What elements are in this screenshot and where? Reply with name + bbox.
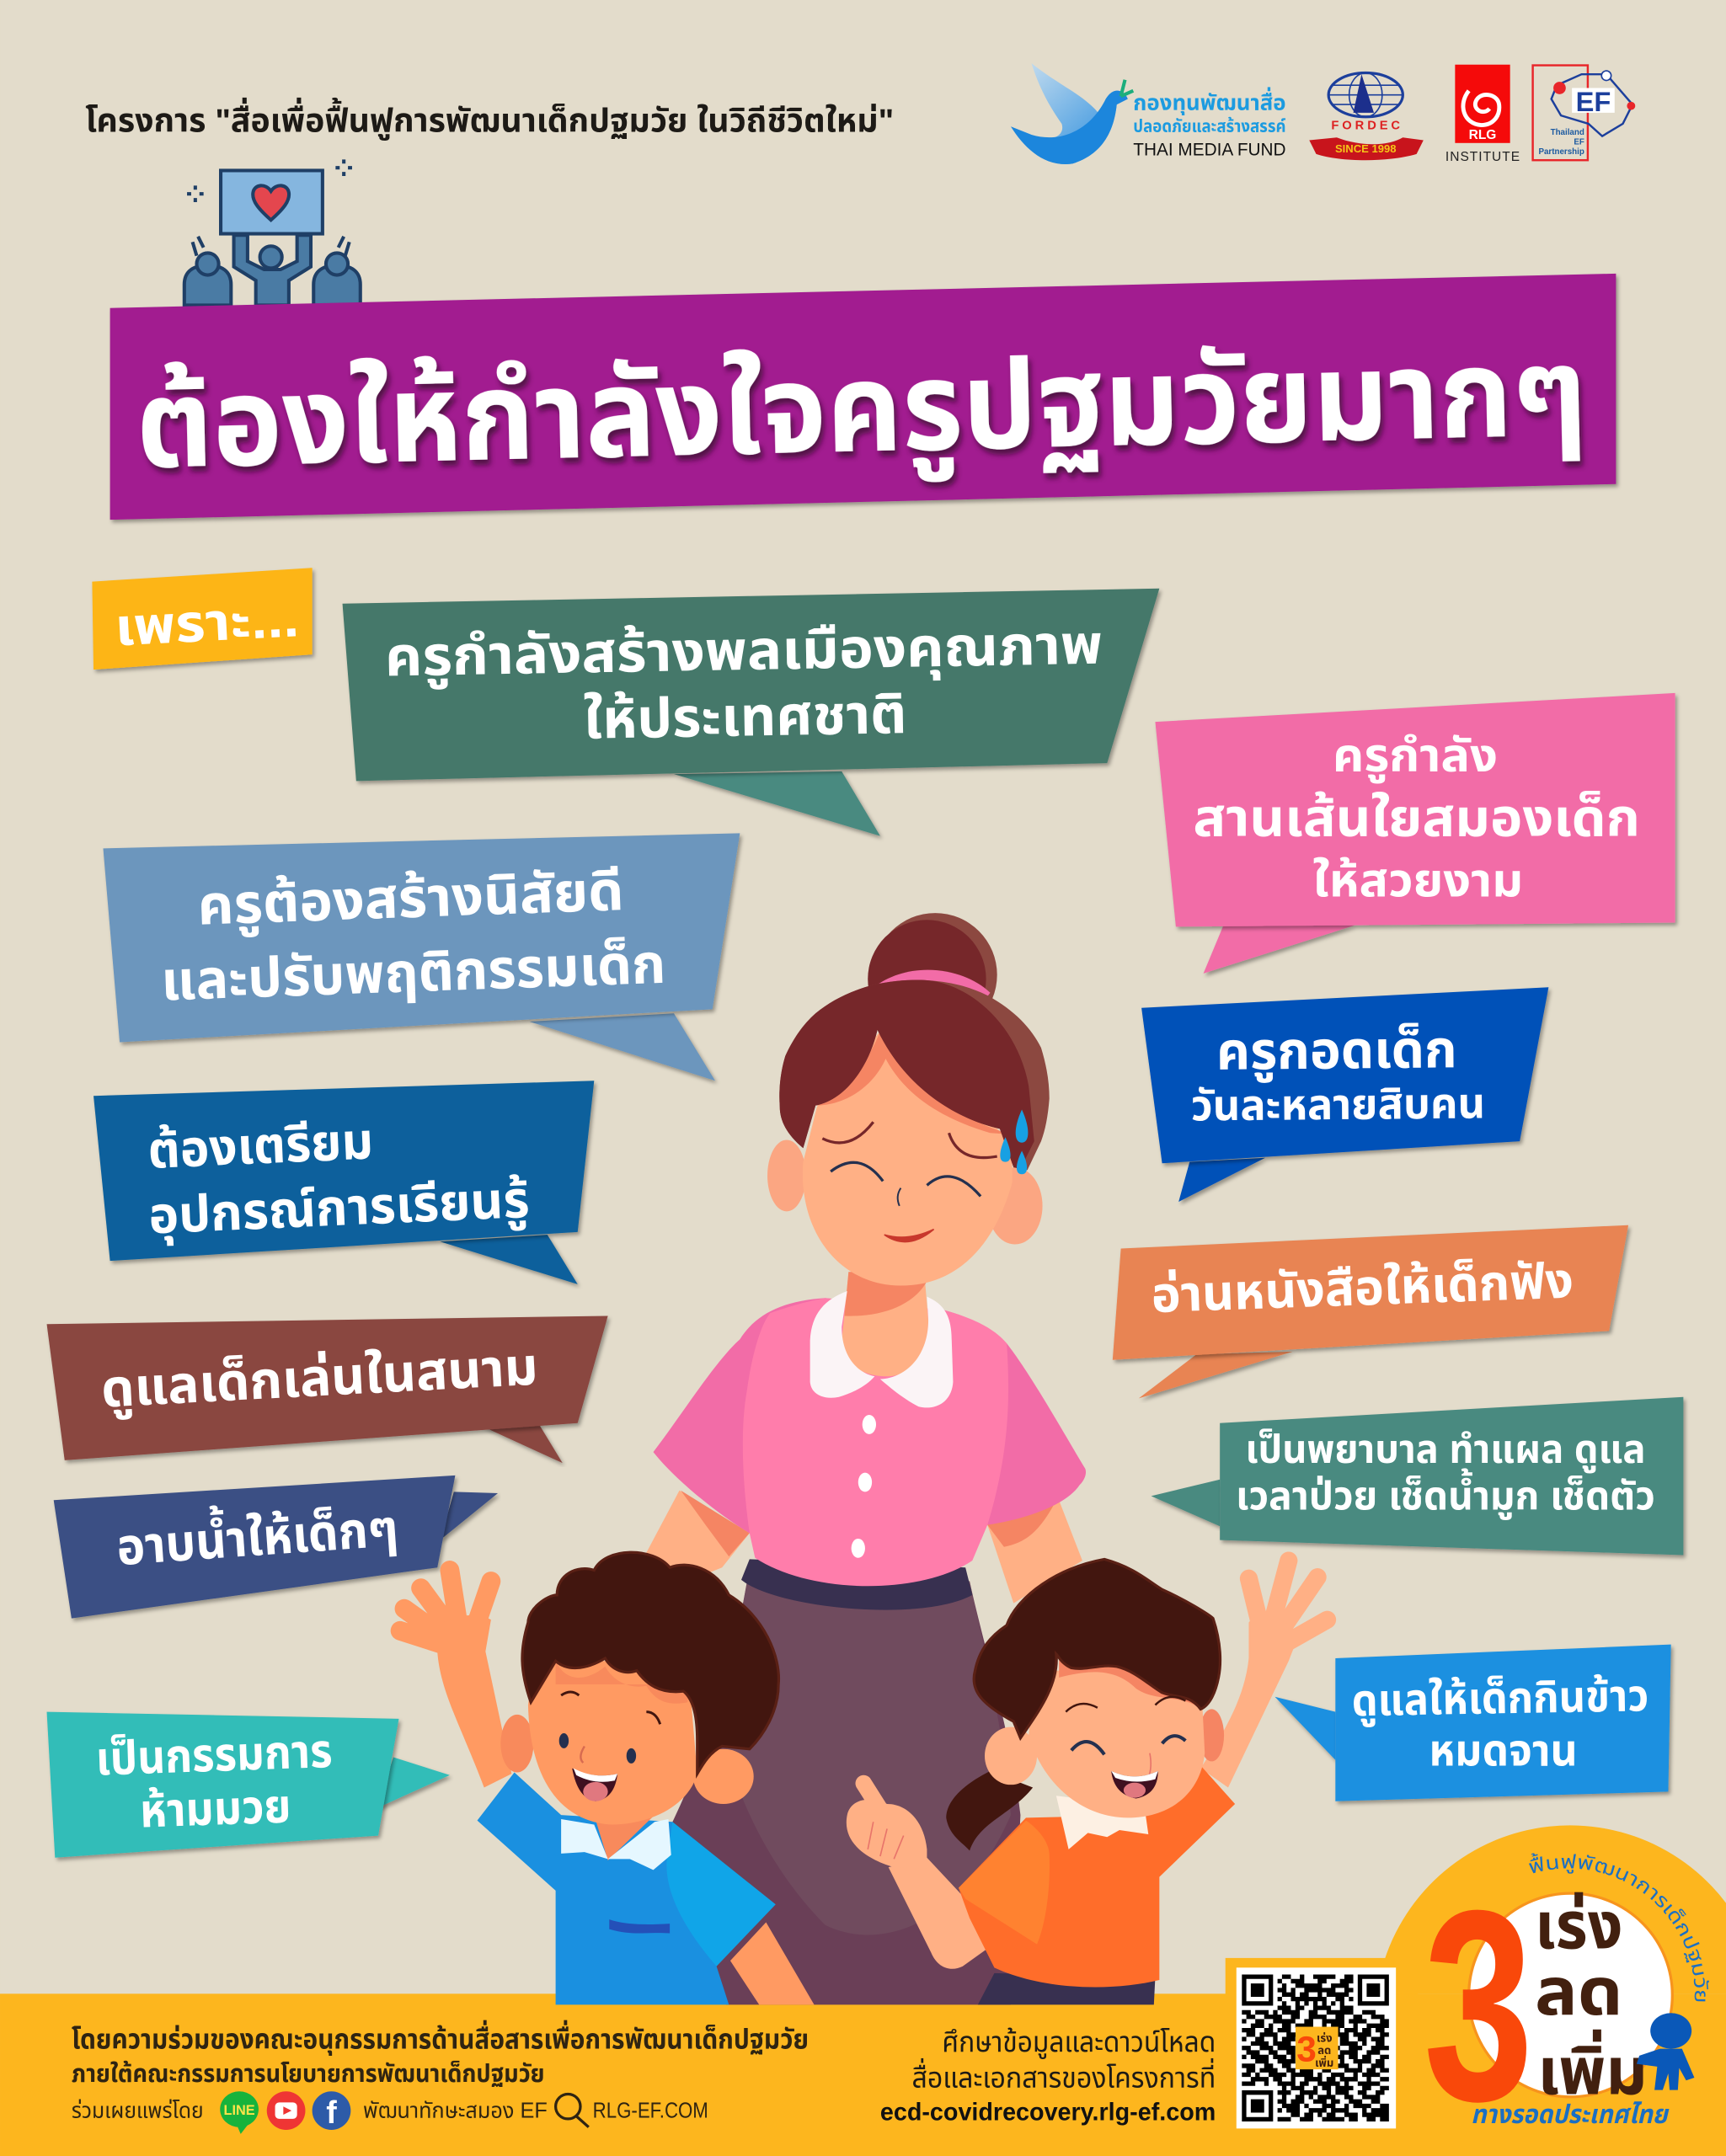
collar (810, 1291, 953, 1407)
girl left arm (889, 1858, 1002, 1969)
QR code: เพิ่ม (1315, 2056, 1333, 2069)
skirt (672, 1567, 1020, 2004)
speech bubble: referee (47, 1712, 450, 1858)
speech bubble: nursing: เป็นพยาบาล ทำแผล ดูแล (1245, 1428, 1645, 1474)
speech bubble: hugging children: ครูกอดเด็ก (1216, 1021, 1457, 1084)
footer partners text (72, 2020, 809, 2122)
speech bubble: weaving brain fibers (1155, 693, 1675, 974)
boy hair (522, 1552, 778, 1774)
boy neck (594, 1815, 655, 1860)
boy ears (500, 1715, 533, 1772)
girl pants (978, 1973, 1155, 2004)
speech bubble: weaving brain fibers: ให้สวยงาม (1312, 854, 1523, 906)
icon: people holding heart sign (184, 159, 361, 305)
ears (767, 1139, 806, 1211)
girl shirt (959, 1765, 1235, 1987)
header project title: โครงการ "สื่อเพื่อฟื้นฟูการพัฒนาเด็กปฐมวัย ในวิถีชีวิตใหม่" (85, 98, 894, 141)
hair bun (874, 913, 997, 1037)
speech bubble: referee: ห้ามมวย (139, 1780, 291, 1838)
logo: RLG Institute: INSTITUTE (1445, 150, 1520, 164)
logo: Thai Media Fund: THAI MEDIA FUND (1133, 140, 1286, 159)
boy raised arm and hand (400, 1570, 511, 1787)
belt (741, 1559, 972, 1610)
footer download text: ecd-covidrecovery.rlg-ef.com (880, 2099, 1216, 2127)
boy face (528, 1661, 697, 1825)
logo: RLG Institute (1445, 65, 1520, 164)
logo: Thai Media Fund: กองทุนพัฒนาสื่อ (1133, 87, 1286, 116)
tagline: ทางรอดประเทศไทย (1471, 2100, 1670, 2129)
boy collar (561, 1819, 671, 1870)
boy shirt (478, 1772, 729, 2004)
QR code: ลด (1317, 2044, 1331, 2057)
face details (822, 1122, 997, 1158)
speech bubble: finishing meals: หมดจาน (1429, 1726, 1578, 1775)
logo: Thailand EF Partnership: Thailand (1551, 128, 1584, 137)
logo: Thailand EF Partnership: Partnership (1538, 147, 1584, 157)
illustration: girl (847, 1559, 1328, 2004)
girl ears (985, 1727, 1037, 1785)
footer download text: ศึกษาข้อมูลและดาวน์โหลด (942, 2026, 1216, 2059)
icon: LINE (220, 2091, 259, 2134)
girl hand (847, 1784, 927, 1869)
icon: LINE: LINE (224, 2103, 255, 2118)
logo: Thai Media Fund: ปลอดภัยและสร้างสรรค์ (1133, 117, 1286, 136)
shirt (654, 1298, 1086, 1533)
icon: YouTube (267, 2091, 305, 2130)
logo: Thailand EF Partnership: EF (1576, 86, 1611, 117)
speech bubble: weaving brain fibers: สานเส้นใยสมองเด็ก (1193, 790, 1640, 848)
speech bubble: playground (47, 1315, 608, 1463)
label: because: เพราะ... (113, 590, 301, 658)
illustration: boy (400, 1552, 815, 2004)
blue mascot (1637, 2013, 1694, 2090)
speech bubble: reading aloud (1113, 1225, 1628, 1398)
icon: Facebook: f (326, 2095, 337, 2130)
footer band (0, 1825, 1726, 2156)
speech bubble: build good habits (103, 833, 740, 1081)
logo: Thai Media Fund (1011, 63, 1286, 164)
girl neck and collar (1056, 1796, 1148, 1849)
speech bubble: nursing: เวลาป่วย เช็ดน้ำมูก เช็ดตัว (1236, 1468, 1655, 1521)
speech bubble: prepare materials: ต้องเตรียม (147, 1112, 375, 1179)
buttons (863, 1415, 876, 1434)
QR code (1237, 1967, 1396, 2128)
badge words: เร่ง (1535, 1888, 1623, 1962)
logo: FORDEC: FORDEC (1331, 119, 1400, 132)
QR code: เร่ง (1317, 2031, 1333, 2044)
title text: ต้องให้กำลังใจครูปฐมวัยมากๆ (135, 323, 1589, 500)
sweat drops (1000, 1110, 1028, 1174)
footer partners text: ภายใต้คณะกรรมการนโยบายการพัฒนาเด็กปฐมวัย (72, 2059, 545, 2088)
girl raised arm and hand (1200, 1561, 1328, 1787)
girl hair (974, 1559, 1220, 1738)
hair (779, 979, 1050, 1170)
speech bubble: nursing (1152, 1397, 1683, 1556)
girl ponytail (946, 1771, 1033, 1851)
title banner (110, 274, 1616, 520)
girl face details (1071, 1736, 1185, 1754)
logo: Thailand EF Partnership (1533, 66, 1635, 160)
logo: RLG Institute: RLG (1469, 128, 1496, 142)
speech bubble: finishing meals (1274, 1645, 1671, 1801)
face (803, 1031, 1013, 1286)
speech bubble: prepare materials (94, 1081, 594, 1284)
speech bubble: hugging children: วันละหลายสิบคน (1190, 1079, 1485, 1130)
icon: Facebook (313, 2091, 350, 2130)
speech bubble: build good habits: ครูต้องสร้างนิสัยดี (196, 860, 625, 939)
arms (644, 1491, 750, 1582)
boy forearm (730, 1922, 815, 2004)
footer partners text: RLG-EF.COM (593, 2097, 708, 2122)
speech bubble: build good habits: และปรับพฤติกรรมเด็ก (160, 933, 666, 1012)
icon: magnifier (556, 2095, 589, 2127)
speech bubble: quality citizens (343, 589, 1159, 836)
logo: Thailand EF Partnership: EF (1574, 137, 1584, 147)
logo: FORDEC (1309, 73, 1424, 160)
speech bubble: quality citizens: ครูกำลังสร้างพลเมืองคุณภาพ (384, 614, 1103, 691)
logo: FORDEC: SINCE 1998 (1335, 142, 1397, 155)
boy face details (559, 1733, 569, 1748)
badge: 3 เร่ง ลด เพิ่ม: เพิ่ม (1537, 2029, 1648, 2109)
speech bubble: weaving brain fibers: ครูกำลัง (1333, 729, 1498, 784)
speech bubble: referee: เป็นกรรมการ (95, 1725, 333, 1785)
numeral 3: 3 (1424, 1854, 1533, 2156)
badge: 3 เร่ง ลด เพิ่ม (1424, 1853, 1709, 2156)
QR code: 3 (1296, 2029, 1317, 2068)
girl face (1029, 1671, 1205, 1817)
curved slogan: ฟื้นฟูพัฒนาการเด็กปฐมวัย (1528, 1853, 1709, 2001)
speech bubble: quality citizens: ให้ประเทศชาติ (583, 683, 907, 750)
neck (842, 1272, 928, 1376)
speech bubble: bathing children: อาบน้ำให้เด็กๆ (115, 1492, 400, 1576)
footer partners text: ร่วมเผยแพร่โดย (72, 2097, 204, 2122)
label: because (92, 568, 313, 670)
speech bubble: prepare materials: อุปกรณ์การเรียนรู้ (147, 1171, 531, 1247)
speech bubble: reading aloud: อ่านหนังสือให้เด็กฟัง (1151, 1254, 1574, 1323)
speech bubble: hugging children (1141, 987, 1548, 1202)
speech bubble: bathing children (54, 1476, 498, 1619)
speech bubble: playground: ดูแลเด็กเล่นในสนาม (99, 1338, 540, 1422)
footer download text (880, 2026, 1216, 2127)
illustration: teacher (644, 913, 1086, 2004)
badge: 3 เร่ง ลด เพิ่ม: ลด (1535, 1955, 1623, 2029)
speech bubble: finishing meals: ดูแลให้เด็กกินข้าว (1351, 1672, 1649, 1727)
footer partners text: พัฒนาทักษะสมอง EF (363, 2097, 548, 2122)
footer partners text: โดยความร่วมของคณะอนุกรรมการด้านสื่อสารเพื่อการพัฒนาเด็กปฐมวัย (72, 2020, 809, 2056)
footer download text: สื่อและเอกสารของโครงการที่ (911, 2057, 1216, 2094)
